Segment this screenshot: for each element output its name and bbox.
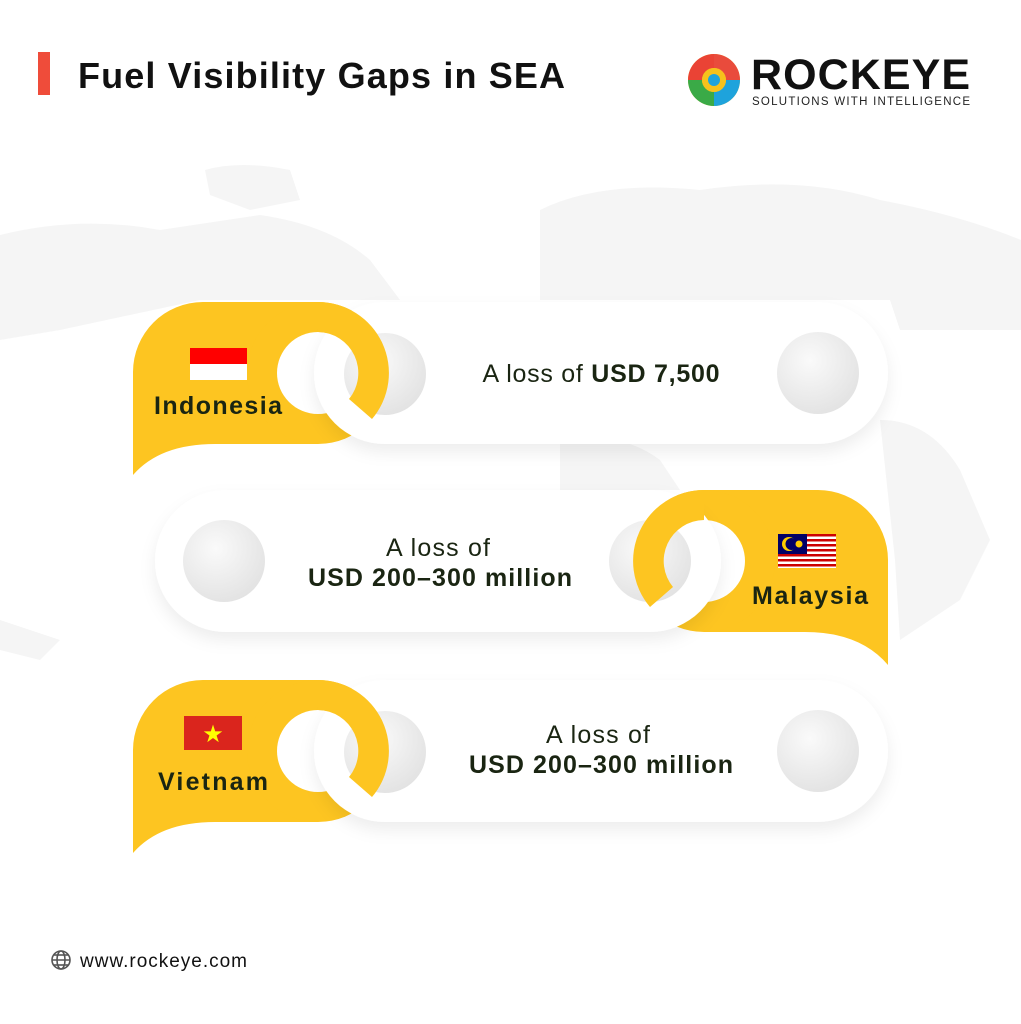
- title: Fuel Visibility Gaps in SEA: [78, 55, 565, 96]
- flag: Vietnam: [184, 716, 242, 750]
- logo: SOLUTIONS WITH INTELLIGENCE: [752, 96, 970, 108]
- background world map: [0, 165, 1021, 660]
- logo icon: [688, 54, 740, 106]
- flag: Vietnam: ★: [202, 721, 224, 748]
- label: Indonesia: Indonesia: [154, 392, 283, 420]
- text: loss Vietnam: A loss of: [546, 721, 650, 749]
- flag: Malaysia: [778, 534, 836, 568]
- footer website: www.rockeye.com: [79, 951, 247, 972]
- logo: [688, 51, 970, 108]
- yellow tag: [704, 490, 888, 665]
- card: Malaysia: USD 200–300 million: [308, 564, 572, 592]
- card: Vietnam: [133, 680, 888, 853]
- text: loss Malaysia: A loss of: [386, 534, 490, 562]
- white pill: [155, 490, 721, 632]
- yellow tag: [133, 680, 318, 853]
- yellow tag: [133, 302, 318, 475]
- flag: Indonesia: [190, 348, 247, 380]
- icon: globe: [52, 951, 70, 969]
- card: Malaysia: [155, 490, 888, 665]
- white pill: [314, 680, 888, 822]
- label: Vietnam: Vietnam: [158, 768, 268, 796]
- white pill: [314, 302, 888, 444]
- logo wordmark: ROCKEYE: [751, 51, 970, 99]
- label: Malaysia: Malaysia: [752, 582, 869, 610]
- card: Indonesia: [133, 302, 888, 475]
- card: Vietnam: USD 200–300 million: [469, 751, 733, 779]
- text: loss Indonesia: A loss of USD 7,500: [482, 360, 720, 388]
- title accent bar: [38, 52, 50, 95]
